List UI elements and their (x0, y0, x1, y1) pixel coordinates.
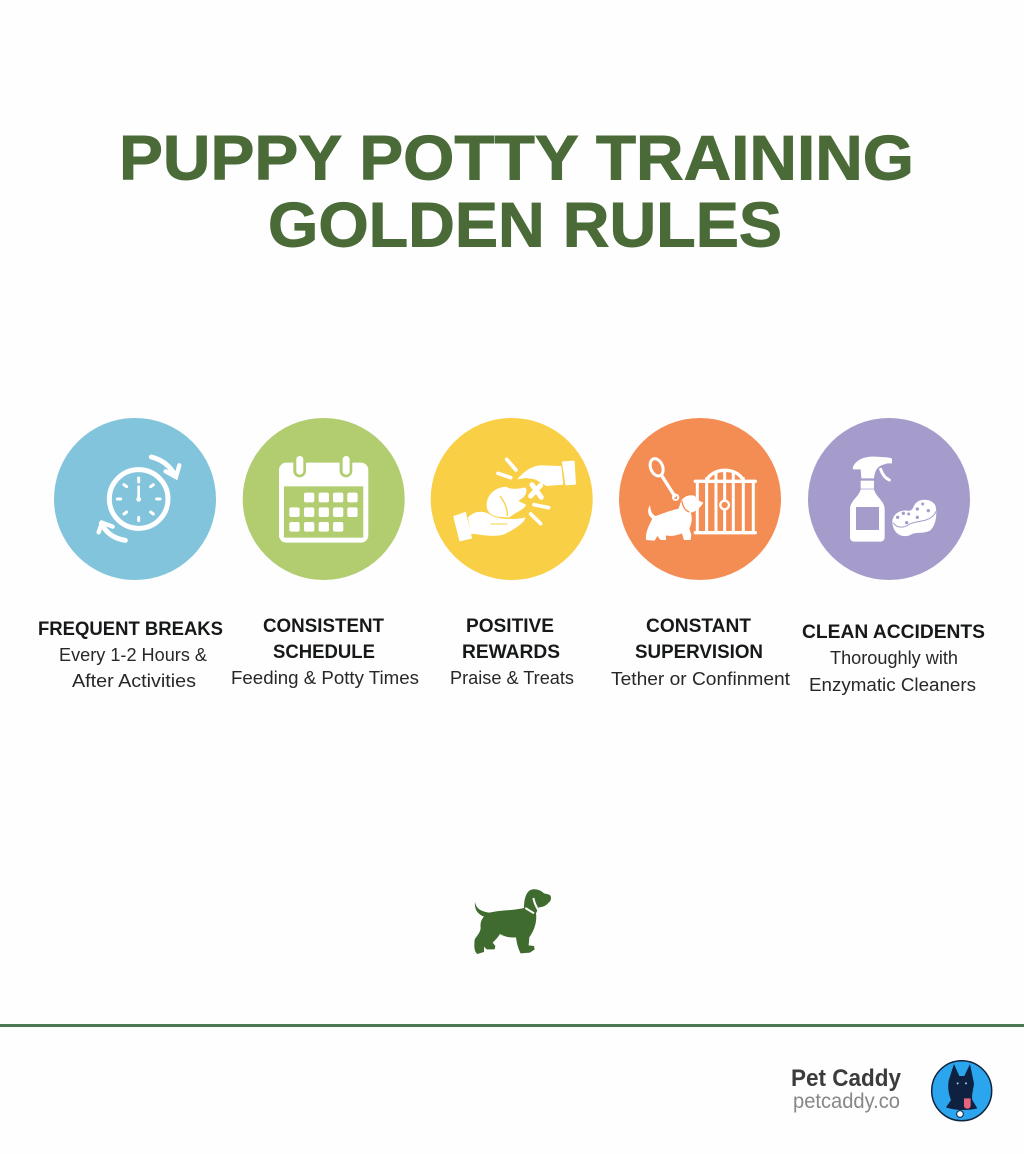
panel: positive rewards (431, 418, 593, 688)
label: constant supervision: Tether or Confinment (611, 668, 790, 689)
label: frequent breaks (38, 618, 223, 691)
title: GOLDEN RULES (268, 190, 782, 260)
label: clean accidents: Thoroughly with (830, 647, 958, 668)
label: consistent schedule: CONSISTENT (263, 615, 384, 637)
label: constant supervision (611, 615, 790, 689)
footer brand text: Pet Caddy (791, 1065, 902, 1092)
label: clean accidents (802, 621, 985, 695)
title: PUPPY POTTY TRAINING (119, 124, 914, 194)
icon: calendar (243, 418, 405, 580)
label: clean accidents: Enzymatic Cleaners (809, 674, 976, 695)
label: constant supervision: SUPERVISION (635, 641, 763, 663)
label: positive rewards: REWARDS (462, 641, 560, 663)
label: positive rewards (450, 615, 574, 688)
icon: hands, puppy and treat (431, 418, 593, 580)
label: clean accidents: CLEAN ACCIDENTS (802, 621, 985, 643)
icon: pet caddy logo (932, 1061, 992, 1121)
label: frequent breaks: Every 1-2 Hours & (59, 644, 208, 665)
icon: spray bottle and sponge (808, 418, 970, 580)
label: consistent schedule: Feeding & Potty Times (231, 667, 419, 688)
footer brand text (791, 1065, 902, 1113)
icon: dog silhouette (474, 889, 551, 954)
icon: leashed dog and gate (619, 418, 781, 580)
panel: consistent schedule (231, 418, 419, 688)
label: consistent schedule: SCHEDULE (273, 641, 375, 663)
panel: clean accidents (802, 418, 985, 695)
footer brand text: petcaddy.co (793, 1090, 900, 1113)
label: constant supervision: CONSTANT (646, 615, 751, 637)
label: frequent breaks: FREQUENT BREAKS (38, 618, 223, 640)
label: positive rewards: Praise & Treats (450, 667, 574, 688)
label: positive rewards: POSITIVE (466, 615, 554, 637)
footer divider (0, 1024, 1024, 1027)
panel: frequent breaks (38, 418, 223, 691)
label: frequent breaks: After Activities (72, 670, 196, 691)
icon: clock with arrows (54, 418, 216, 580)
panel: constant supervision (611, 418, 790, 689)
label: consistent schedule (231, 615, 419, 688)
title (119, 124, 914, 260)
